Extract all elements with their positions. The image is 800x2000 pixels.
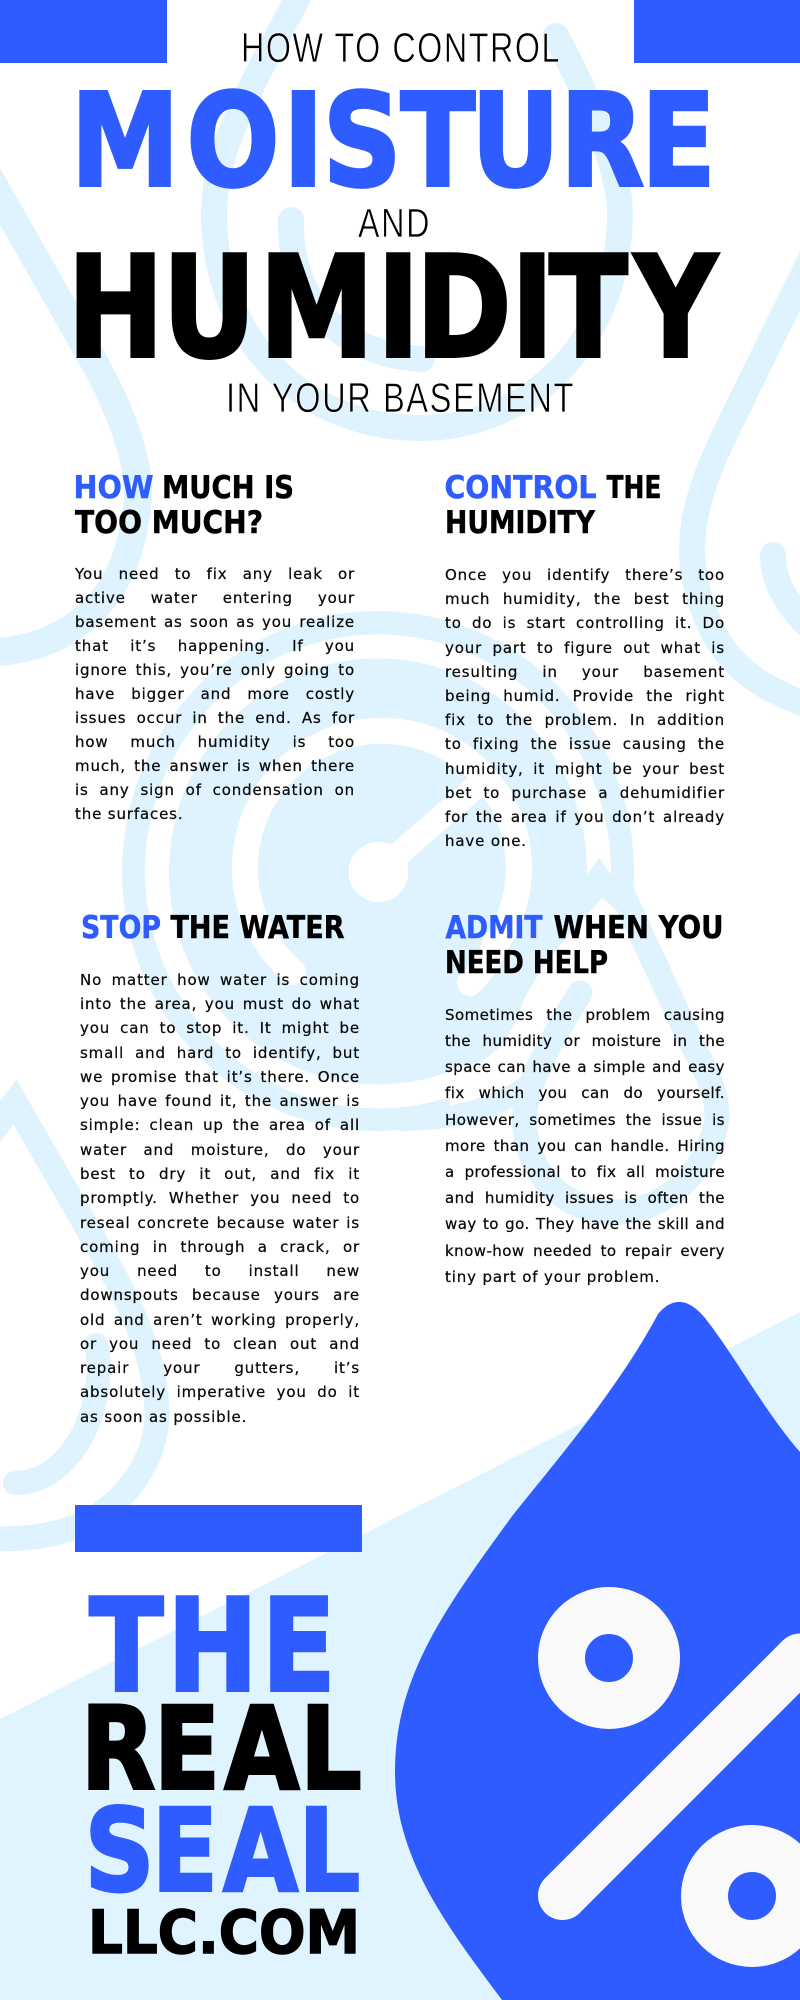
- bottom light blue wedge: [0, 1312, 800, 2000]
- title line: how to control: HOW TO CONTROL: [241, 24, 561, 71]
- text block: stop the water: you can to stop it. It might be: [80, 1019, 360, 1037]
- heading: how much is too much: HOW: [74, 470, 154, 506]
- panel: how much is too much: [74, 470, 355, 823]
- text block: control the humidity: [445, 566, 725, 850]
- text block: admit when you need help: the humidity or moisture in the: [445, 1032, 725, 1050]
- central drop white stem: [378, 785, 478, 872]
- text block: admit when you need help: a professional to fix all moisture: [445, 1163, 725, 1181]
- text block: stop the water: reseal concrete because water is: [80, 1214, 360, 1232]
- heading: how much is too much: [74, 470, 294, 541]
- text block: how much is too much: You need to fix any leak or: [75, 565, 355, 583]
- heading: control the humidity: CONTROL: [444, 470, 596, 506]
- text block: stop the water: downspouts because yours are: [80, 1286, 360, 1304]
- text block: admit when you need help: tiny part of your problem.: [445, 1268, 660, 1286]
- text block: control the humidity: resulting in your basement: [445, 663, 725, 681]
- lower left drop outline: [0, 1102, 157, 1539]
- icon: large blue drop with percent sign: [395, 1302, 800, 2000]
- title line: in your basement: IN YOUR BASEMENT: [226, 374, 575, 421]
- text block: control the humidity: to fixing the issue causing the: [445, 735, 725, 753]
- central drop filled disc: [122, 611, 634, 1131]
- central drop white interior: [440, 898, 730, 1250]
- text block: stop the water: simple: clean up the area of all: [80, 1116, 360, 1134]
- text block: admit when you need help: fix which you can do yourself.: [445, 1084, 725, 1102]
- text block: control the humidity: for the area if you don’t already: [445, 808, 725, 826]
- top right blue bar: [634, 0, 800, 63]
- lower left drop inner arc: [15, 1345, 99, 1483]
- text block: how much is too much: issues occur in the end. As for: [75, 709, 355, 727]
- text block: stop the water: water and moisture, do your: [80, 1141, 360, 1159]
- text block: how much is too much: basement as soon as you realize: [75, 613, 355, 631]
- background water-drop line art: [0, 0, 800, 1539]
- heading: how much is too much: MUCH IS: [162, 470, 294, 506]
- text block: how much is too much: is any sign of condensation on: [75, 781, 355, 799]
- central drop gap notch: [586, 858, 612, 876]
- text block: how much is too much: [74, 565, 355, 823]
- heading: stop the water: [81, 910, 345, 946]
- text block: stop the water: repair your gutters, it’s: [80, 1359, 360, 1377]
- text block: control the humidity: to do is start controlling it. Do: [445, 614, 725, 632]
- title line: and: AND: [358, 200, 431, 246]
- text block: admit when you need help: way to go. They have the skill and: [445, 1215, 725, 1233]
- text block: how much is too much: how much humidity is too: [75, 733, 355, 751]
- text block: stop the water: or you need to clean out and: [80, 1335, 360, 1353]
- central drop white gap ring: [157, 646, 599, 1096]
- text block: admit when you need help: However, sometimes the issue is: [445, 1110, 725, 1128]
- logo line: llc.com: LLC.COM: [88, 1898, 360, 1968]
- right drop outline: [692, 250, 800, 708]
- logo line: seal: SEAL: [85, 1785, 360, 1917]
- left drop outline: [0, 170, 138, 653]
- top left blue bar: [0, 0, 167, 63]
- text block: stop the water: into the area, you must do what: [80, 995, 360, 1013]
- top centre drop outline: [214, 0, 620, 428]
- text block: how much is too much: much, the answer is when there: [75, 757, 355, 775]
- text block: admit when you need help: know-how needed to repair every: [445, 1242, 725, 1260]
- title line: humidity: HUMIDITY: [67, 226, 719, 390]
- text block: control the humidity: humidity, it might be your best: [445, 760, 725, 778]
- central drop white inner ring: [245, 731, 519, 983]
- logo line: real: REAL: [81, 1683, 362, 1815]
- heading: control the humidity: [444, 470, 662, 541]
- text block: control the humidity: bet to purchase a dehumidifier: [445, 784, 725, 802]
- text block: how much is too much: have bigger and more costly: [75, 685, 355, 703]
- text block: stop the water: old and aren’t working properly,: [80, 1311, 360, 1329]
- percent lower ring: [704, 1848, 800, 1944]
- text block: stop the water: you need to install new: [80, 1262, 360, 1280]
- central drop white dot: [348, 842, 408, 902]
- text block: how much is too much: the surfaces.: [75, 805, 183, 823]
- text block: how much is too much: ignore this, you’re only going to: [75, 661, 355, 679]
- central drop outline: [524, 888, 717, 1212]
- heading: admit when you need help: ADMIT: [446, 910, 542, 946]
- text block: admit when you need help: space can have a simple and easy: [445, 1058, 725, 1076]
- drop shape: [395, 1302, 800, 2000]
- text block: stop the water: you have found it, the answer is: [80, 1092, 360, 1110]
- right drop inner arc: [773, 555, 800, 632]
- text block: admit when you need help: more than you can handle. Hiring: [445, 1137, 725, 1155]
- heading: stop the water: THE WATER: [170, 910, 345, 946]
- heading: admit when you need help: [445, 910, 724, 981]
- title line: moisture: MOISTURE: [71, 67, 716, 217]
- panel: admit when you need help: [445, 910, 725, 1286]
- text block: stop the water: promptly. Whether you need to: [80, 1189, 360, 1207]
- central drop lower band: [400, 1080, 535, 1120]
- heading: stop the water: STOP: [81, 910, 161, 946]
- text block: control the humidity: much humidity, the best thing: [445, 590, 725, 608]
- text block: stop the water: [80, 971, 360, 1426]
- text block: how much is too much: that it’s happening. If you: [75, 637, 355, 655]
- text block: stop the water: small and hard to identify, but: [80, 1044, 360, 1062]
- logo line: the: THE: [89, 1573, 336, 1722]
- company logo wordmark: [81, 1573, 362, 1968]
- text block: control the humidity: fix to the problem. In addition: [445, 711, 725, 729]
- text block: control the humidity: your part to figure out what is: [445, 639, 725, 657]
- text block: admit when you need help: Sometimes the problem causing: [445, 1006, 725, 1024]
- percent slash: [562, 1658, 800, 1896]
- text block: control the humidity: being humid. Provide the right: [445, 687, 725, 705]
- text block: control the humidity: Once you identify there’s too: [445, 566, 725, 584]
- text block: admit when you need help: and humidity issues is often the: [445, 1189, 725, 1207]
- text block: admit when you need help: [445, 1006, 725, 1286]
- text block: stop the water: as soon as possible.: [80, 1408, 247, 1426]
- text block: stop the water: best to dry it out, and fix it: [80, 1165, 360, 1183]
- text block: stop the water: absolutely imperative you do it: [80, 1383, 360, 1401]
- heading: admit when you need help: WHEN YOU: [554, 910, 724, 946]
- title: [67, 24, 719, 421]
- heading: control the humidity: HUMIDITY: [445, 505, 595, 541]
- heading: control the humidity: THE: [606, 470, 662, 506]
- text block: stop the water: coming in through a crack, or: [80, 1238, 360, 1256]
- panel: control the humidity: [444, 470, 725, 850]
- text block: stop the water: we promise that it’s there. Once: [80, 1068, 360, 1086]
- text block: how much is too much: active water entering your: [75, 589, 355, 607]
- panel: stop the water: [80, 910, 360, 1426]
- text block: stop the water: No matter how water is coming: [80, 971, 360, 989]
- text block: control the humidity: have one.: [445, 832, 527, 850]
- heading: how much is too much: TOO MUCH?: [75, 505, 263, 541]
- heading: admit when you need help: NEED HELP: [445, 945, 608, 981]
- logo accent bar: [75, 1505, 362, 1552]
- top centre drop inner arc: [291, 220, 422, 359]
- percent upper ring: [562, 1610, 656, 1706]
